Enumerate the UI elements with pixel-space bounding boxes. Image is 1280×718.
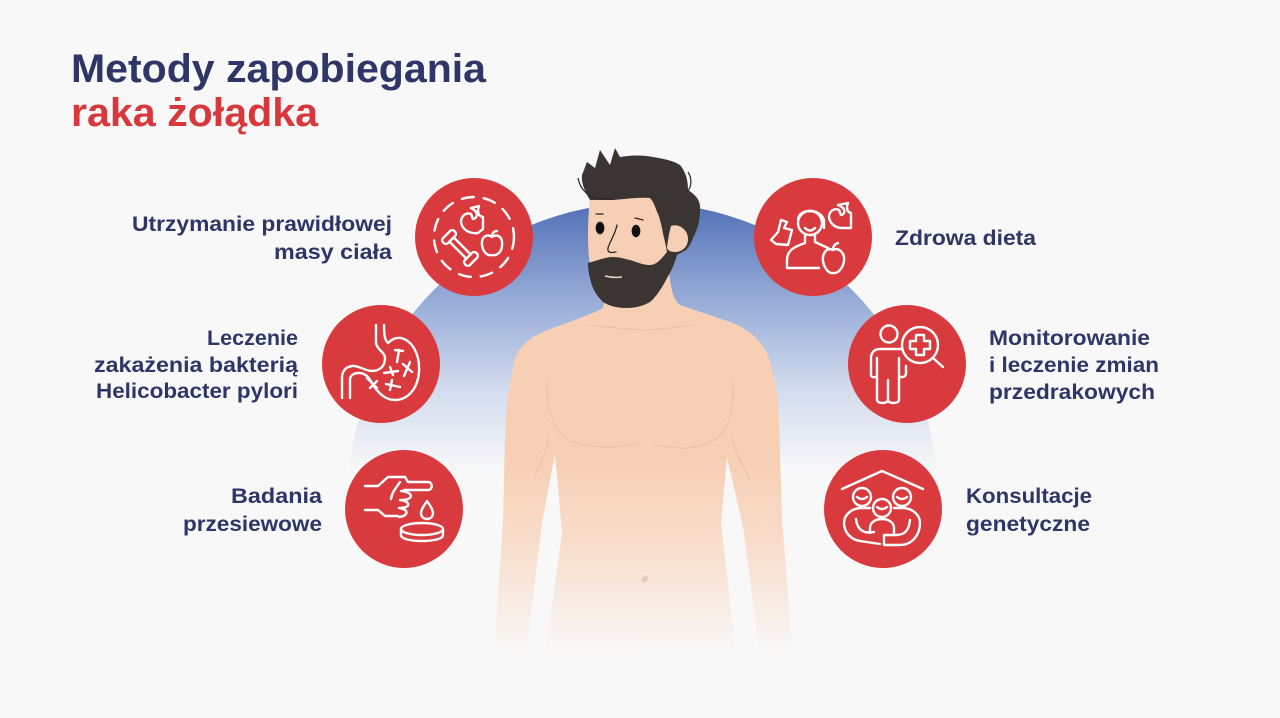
icon: person with magnifier	[871, 326, 943, 403]
label	[94, 326, 299, 403]
label	[966, 484, 1092, 536]
panel: screening	[183, 450, 463, 568]
red circle	[754, 178, 872, 296]
icon: stomach with bacteria	[342, 325, 419, 400]
eyebrows and nose	[596, 214, 643, 253]
ear	[667, 225, 688, 252]
title	[71, 47, 487, 135]
label: zakażenia bakterią	[94, 353, 299, 377]
icon: person with healthy food	[771, 203, 851, 273]
panel: healthy body weight	[132, 178, 533, 296]
body contour lines	[535, 325, 750, 480]
label: Utrzymanie prawidłowej	[132, 212, 392, 236]
label	[989, 326, 1159, 404]
label	[132, 212, 393, 264]
label: Leczenie	[207, 326, 298, 350]
face	[588, 195, 670, 290]
panel: healthy diet	[754, 178, 1037, 296]
red circle	[824, 450, 942, 568]
human figure	[495, 148, 793, 655]
label: i leczenie zmian	[989, 353, 1159, 377]
eyes	[596, 222, 640, 237]
red circle	[848, 305, 966, 423]
label: przedrakowych	[989, 380, 1155, 404]
icon: finger prick and petri dish	[365, 477, 443, 541]
torso and arms	[495, 270, 793, 655]
panel: H. pylori treatment	[94, 305, 440, 423]
label	[183, 484, 323, 536]
label: Konsultacje	[966, 484, 1092, 508]
label: Monitorowanie	[989, 326, 1150, 350]
label: przesiewowe	[183, 512, 322, 536]
red circle	[345, 450, 463, 568]
title: raka żołądka	[71, 91, 319, 135]
label: Badania	[231, 484, 323, 508]
red circle	[415, 178, 533, 296]
hair strands	[578, 172, 691, 199]
panel: monitoring precancerous changes	[848, 305, 1159, 423]
mouth	[605, 276, 622, 277]
blue semicircle backdrop	[348, 203, 938, 498]
label: masy ciała	[274, 240, 393, 264]
navel	[640, 574, 650, 584]
label: Helicobacter pylori	[96, 379, 298, 403]
label: genetyczne	[966, 512, 1090, 536]
hair and beard	[582, 148, 700, 308]
red circle	[322, 305, 440, 423]
label: Zdrowa dieta	[895, 226, 1037, 250]
panel: genetic counselling	[824, 450, 1092, 568]
icon: weight with dumbbell and apple	[434, 197, 514, 277]
title: Metody zapobiegania	[71, 47, 487, 91]
icon: family under a roof	[842, 471, 923, 545]
